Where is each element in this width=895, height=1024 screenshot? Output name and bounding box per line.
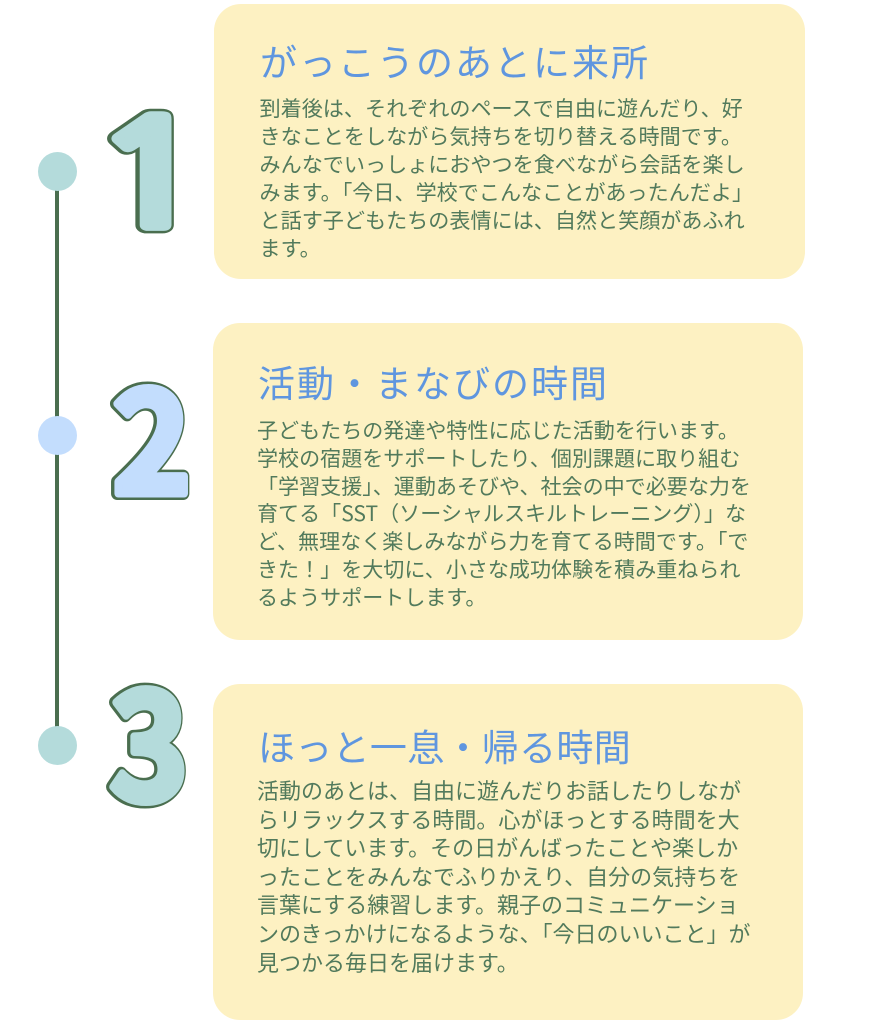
timeline dot 2 <box>38 416 77 454</box>
text block: card 1 <box>260 93 753 263</box>
text block: card 3: ンのきっかけになるような、「今日のいいこと」が <box>257 917 750 949</box>
text block: card 3: 活動のあとは、自由に遊んだりお話したりしなが <box>257 774 741 806</box>
text block: card 2: 「学習支援」、運動あそびや、社会の中で必要な力を <box>257 471 751 501</box>
timeline line <box>55 171 59 746</box>
timeline dot 1 <box>38 152 77 191</box>
text block: card 1: と話す子どもたちの表情には、自然と笑顔があふれ <box>260 205 745 235</box>
timeline dot 3 <box>38 726 77 765</box>
text block: card 3: ったことをみんなでふりかえり、自分の気持ちを <box>257 860 740 892</box>
text block: card 1: ます。 <box>260 233 321 263</box>
numeral 3: 3 <box>108 631 187 843</box>
text block: card 1: 到着後は、それぞれのペースで自由に遊んだり、好 <box>260 93 743 123</box>
panel: card 1 <box>214 4 805 279</box>
numeral 1: 1 <box>92 103 211 248</box>
heading: card 3: ほっと一息・帰る時間 <box>258 718 631 772</box>
text block: card 2 <box>257 415 751 612</box>
panel: card 3 <box>213 684 803 1020</box>
text block: card 3: 見つかる毎日を届けます。 <box>257 946 519 978</box>
numeral 2: 2 <box>112 333 190 535</box>
heading: card 2: 活動・まなびの時間 <box>258 354 609 408</box>
panel: card 2 <box>213 323 803 640</box>
text block: card 2: 学校の宿題をサポートしたり、個別課題に取り組む <box>257 443 740 473</box>
text block: card 3: 言葉にする練習します。親子のコミュニケーショ <box>257 888 739 920</box>
text block: card 1: みます。「今日、学校でこんなことがあったんだよ」 <box>260 177 753 207</box>
text block: card 2: るようサポートします。 <box>257 582 486 612</box>
heading: card 1: がっこうのあとに来所 <box>260 33 650 87</box>
numeral 1: 1 <box>90 103 210 248</box>
text block: card 2: ど、無理なく楽しみながら力を育てる時間です。「で <box>257 526 748 556</box>
numeral 2: 2 <box>112 333 191 535</box>
text block: card 3: 切にしています。その日がんばったことや楽しか <box>257 831 738 863</box>
text block: card 2: きた！」を大切に、小さな成功体験を積み重ねられ <box>257 554 740 584</box>
numeral 3: 3 <box>110 631 188 843</box>
text block: card 2: 育てる「SST（ソーシャルスキルトレーニング）」な <box>257 498 746 528</box>
text block: card 3 <box>257 774 750 978</box>
text block: card 1: きなことをしながら気持ちを切り替える時間です。 <box>260 121 742 151</box>
text block: card 2: 子どもたちの発達や特性に応じた活動を行います。 <box>257 415 739 445</box>
text block: card 1: みんなでいっしょにおやつを食べながら会話を楽し <box>260 149 745 179</box>
text block: card 3: らリラックスする時間。心がほっとする時間を大 <box>257 803 740 835</box>
